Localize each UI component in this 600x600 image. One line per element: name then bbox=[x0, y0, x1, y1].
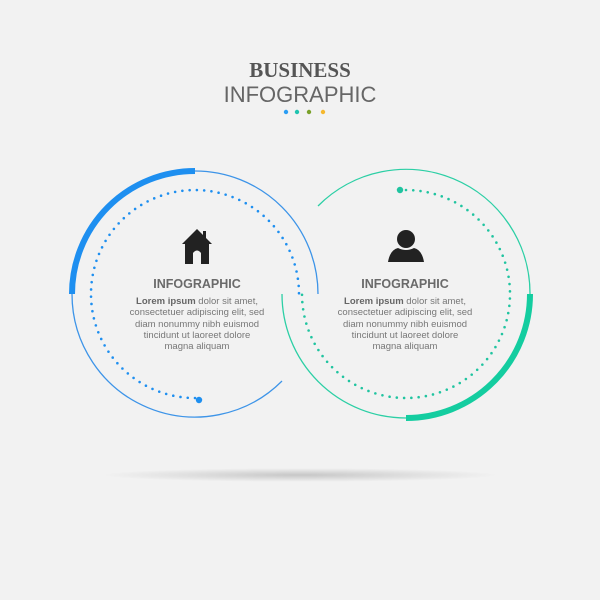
panel text: left: Lorem ipsum dolor sit amet, bbox=[136, 296, 258, 307]
panel text: right: diam nonummy nibh euismod bbox=[343, 319, 467, 330]
subtitle: INFOGRAPHIC bbox=[224, 82, 376, 107]
panel text: right: tincidunt ut laoreet dolore bbox=[352, 330, 458, 341]
panel text: right: magna aliquam bbox=[373, 341, 437, 352]
panel text: right bbox=[338, 277, 472, 352]
left circle bbox=[72, 171, 318, 417]
shadow bbox=[100, 468, 500, 482]
panel text: left: magna aliquam bbox=[165, 341, 229, 352]
title: BUSINESS bbox=[249, 58, 351, 82]
icon: house bbox=[182, 229, 212, 264]
panel text: right: INFOGRAPHIC bbox=[361, 277, 449, 291]
icon: person bbox=[388, 230, 424, 262]
title dots bbox=[284, 110, 325, 114]
panel text: left bbox=[130, 277, 264, 352]
right circle bbox=[282, 169, 530, 418]
panel text: left: consectetuer adipiscing elit, sed bbox=[130, 307, 264, 318]
panel text: left: diam nonummy nibh euismod bbox=[135, 319, 259, 330]
panel text: right: Lorem ipsum dolor sit amet, bbox=[344, 296, 466, 307]
panel text: left: tincidunt ut laoreet dolore bbox=[144, 330, 250, 341]
panel text: left: INFOGRAPHIC bbox=[153, 277, 241, 291]
panel text: right: consectetuer adipiscing elit, sed bbox=[338, 307, 472, 318]
